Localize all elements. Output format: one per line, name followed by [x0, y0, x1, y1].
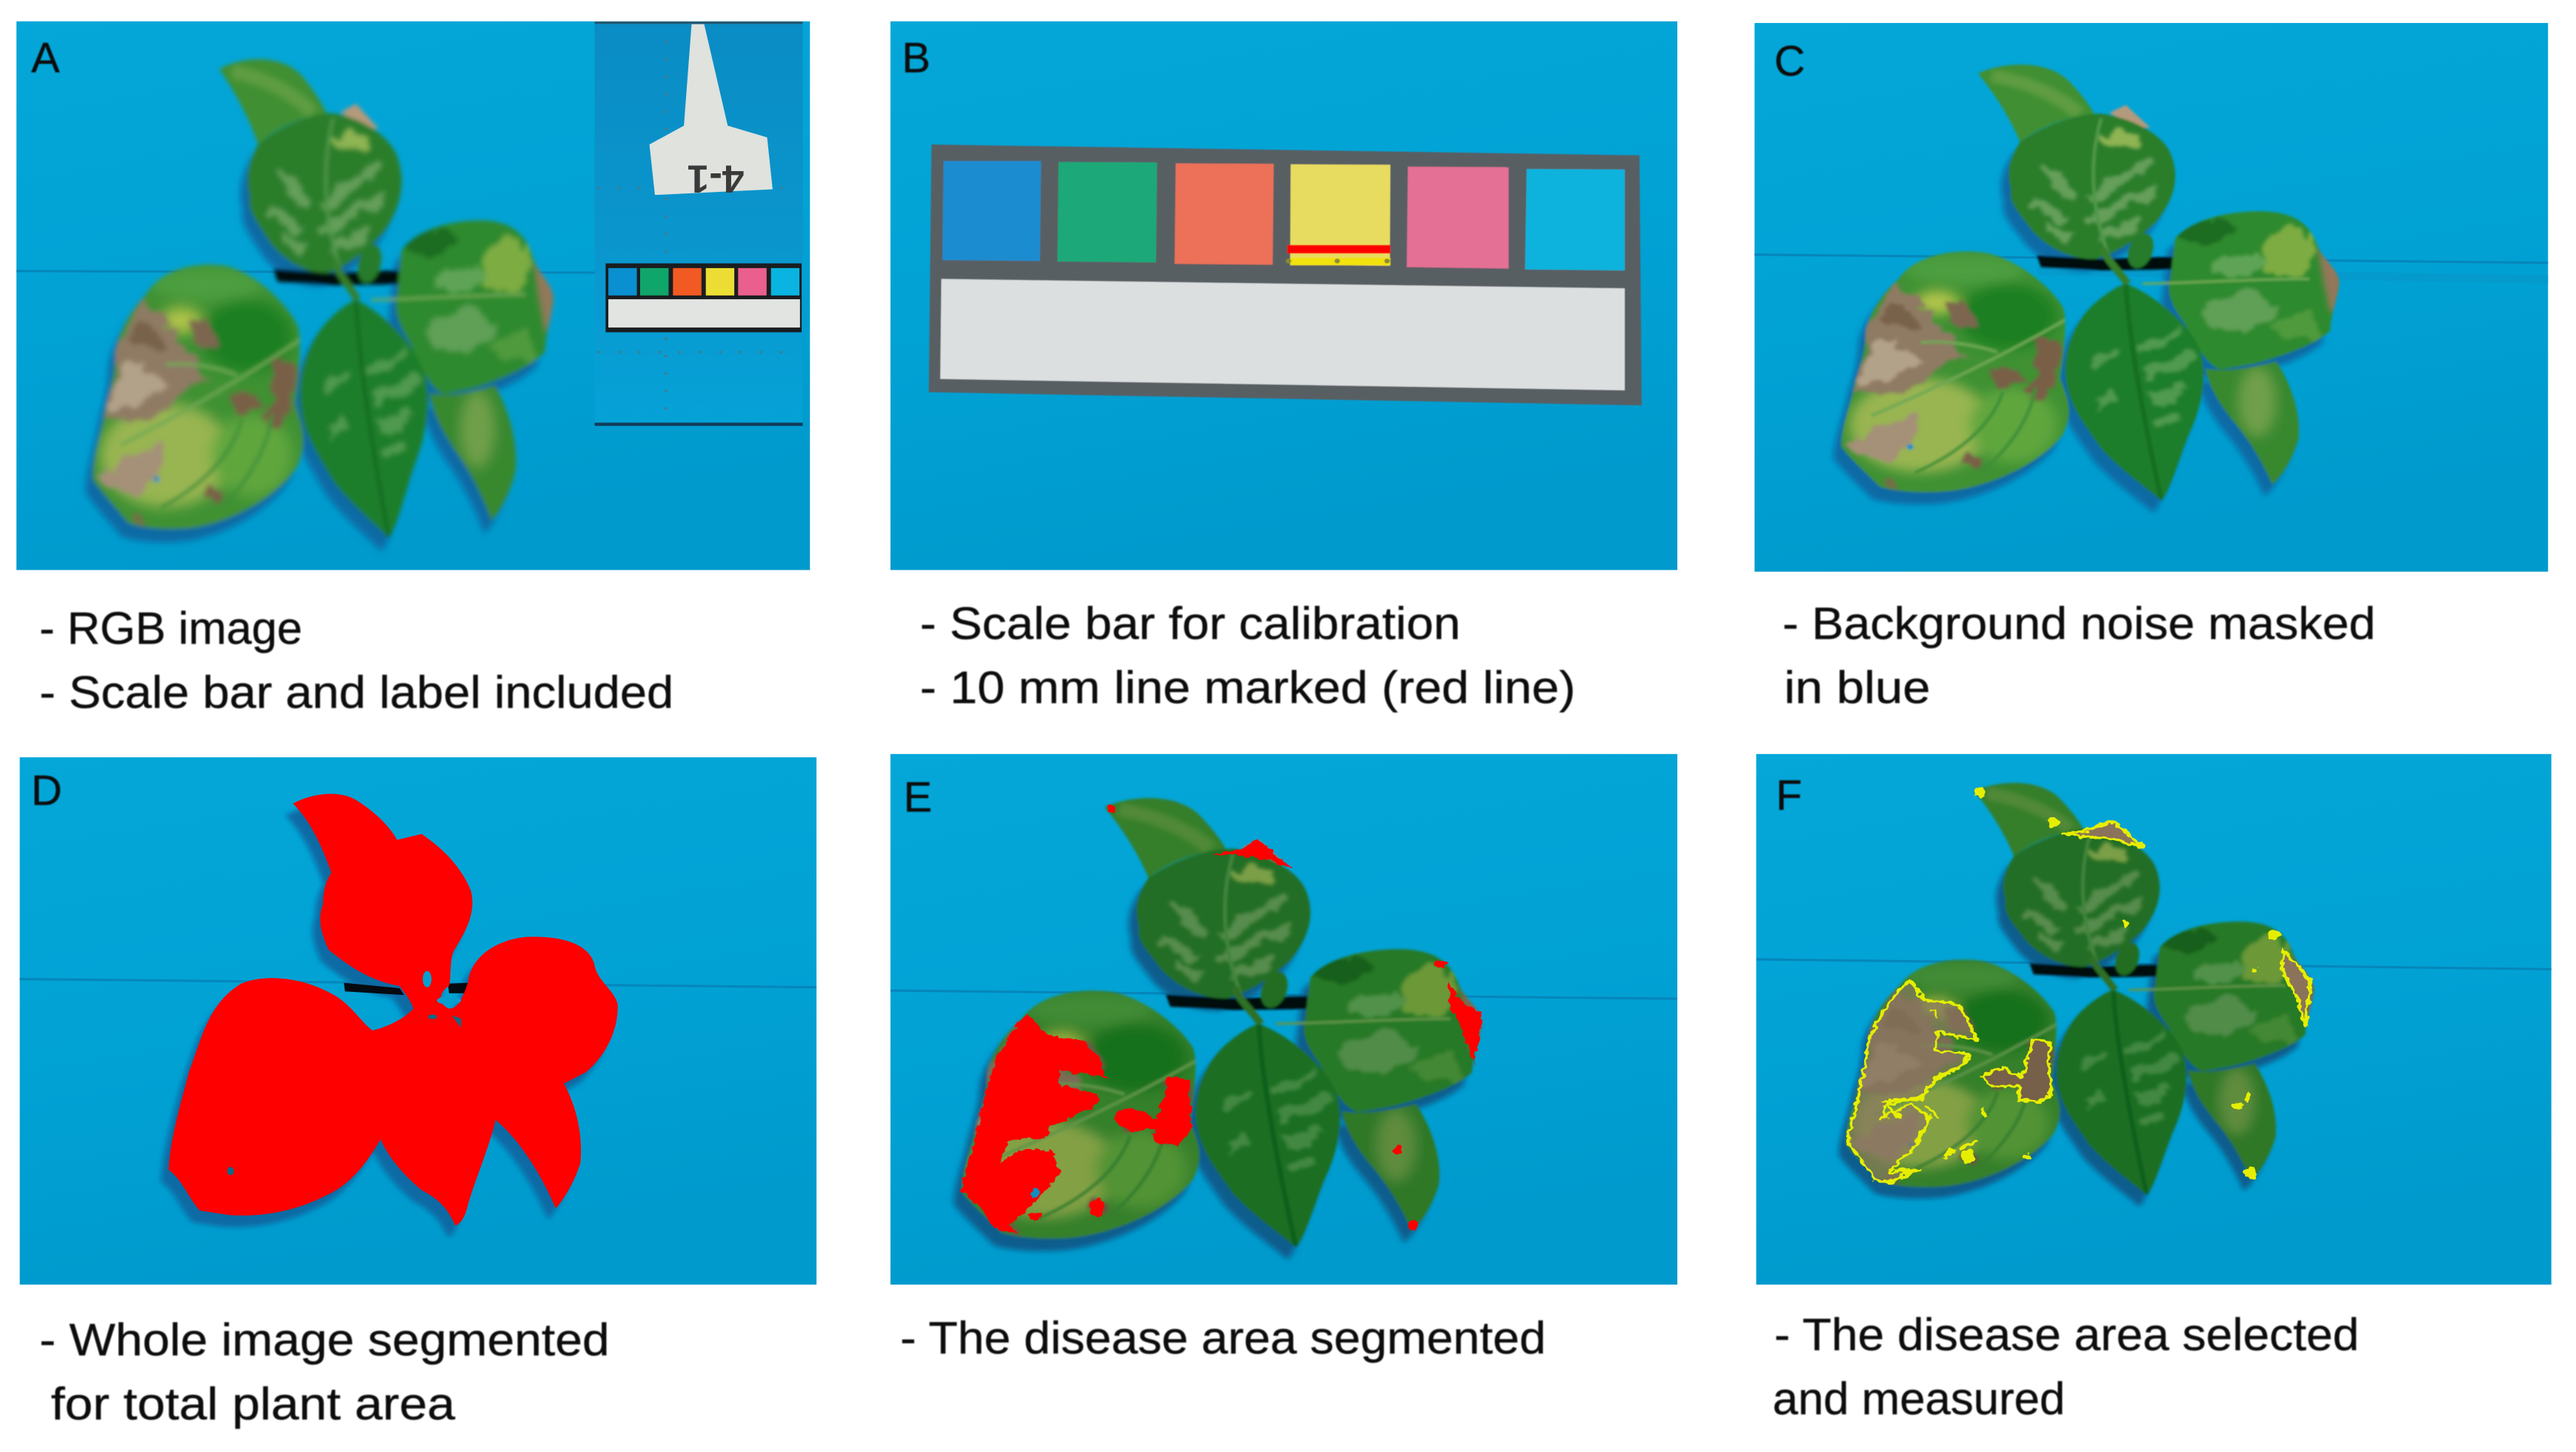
- letter F: F: [1776, 772, 1802, 819]
- plant tag: 4-1: [688, 157, 744, 200]
- letter D: D: [31, 767, 62, 815]
- plant tag: [650, 24, 773, 200]
- panel D: whole plant segmented: [20, 757, 816, 1285]
- letter E: E: [904, 773, 932, 821]
- red disease regions: [962, 805, 1482, 1233]
- plant photo A: [85, 59, 556, 552]
- letter A: A: [31, 35, 60, 82]
- panel A: RGB image: [16, 21, 810, 570]
- red 10 mm line: [1288, 245, 1391, 253]
- red segmented plant: [169, 794, 618, 1225]
- plant photo E: [953, 798, 1485, 1260]
- panel C: background masked: [1754, 23, 2548, 572]
- panel E: disease area segmented: [891, 754, 1677, 1285]
- letter B: B: [902, 35, 931, 82]
- caption A: - Scale bar and label included: [39, 667, 673, 718]
- plant photo C: [1834, 64, 2342, 513]
- caption C: [1783, 599, 2375, 713]
- scale bar mini: [605, 264, 802, 333]
- calibration scale bar: [929, 144, 1642, 405]
- caption A: [39, 603, 673, 718]
- caption B: [920, 599, 1576, 713]
- caption B: - 10 mm line marked (red line): [920, 662, 1576, 713]
- panel B: scale bar: [891, 21, 1677, 570]
- caption E: - The disease area segmented: [900, 1313, 1546, 1363]
- caption B: - Scale bar for calibration: [920, 599, 1460, 649]
- letter C: C: [1774, 38, 1805, 85]
- caption F: and measured: [1773, 1373, 2065, 1424]
- plant photo F: [1839, 783, 2317, 1207]
- yellow disease outlines: [1847, 787, 2312, 1184]
- inset: tag and scale bar: [595, 23, 802, 425]
- caption A: - RGB image: [39, 603, 302, 653]
- caption D: [39, 1314, 610, 1429]
- caption F: - The disease area selected: [1774, 1310, 2359, 1360]
- caption C: in blue: [1784, 662, 1931, 713]
- caption D: for total plant area: [51, 1379, 455, 1429]
- caption D: - Whole image segmented: [39, 1314, 610, 1365]
- caption F: [1773, 1310, 2359, 1424]
- panel F: disease area outlined: [1756, 754, 2552, 1285]
- caption C: - Background noise masked: [1783, 599, 2375, 649]
